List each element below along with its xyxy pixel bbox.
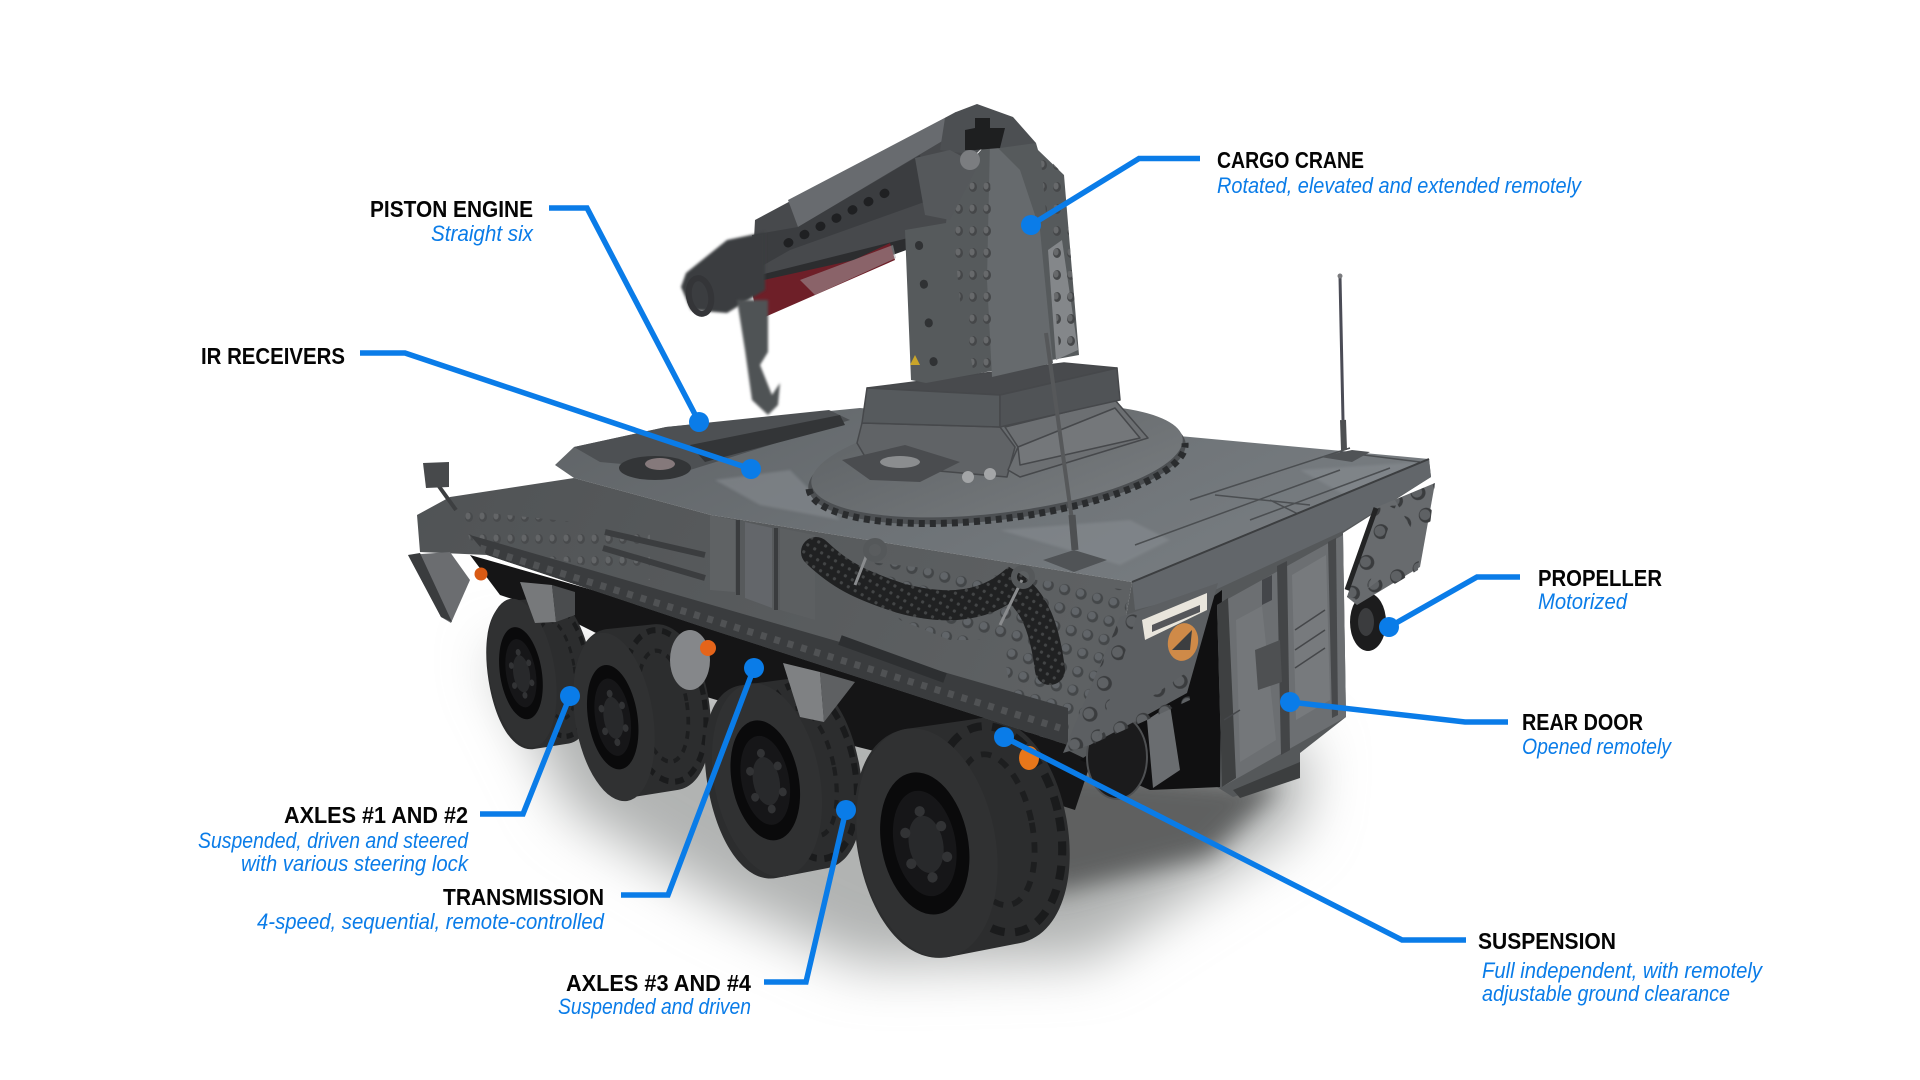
propeller xyxy=(1350,593,1386,651)
net chains xyxy=(855,541,1032,625)
deck seams xyxy=(1135,448,1420,545)
description: Opened remotely xyxy=(1522,734,1673,759)
callout: propeller xyxy=(1379,565,1662,637)
rear door underside xyxy=(1233,762,1300,798)
crane tower face xyxy=(987,140,1053,377)
description: Suspended and driven xyxy=(558,994,751,1019)
dark fill below boom xyxy=(750,213,936,305)
cargo net xyxy=(816,552,1050,670)
heading: PISTON ENGINE xyxy=(370,196,533,222)
turret disc xyxy=(802,387,1192,543)
wheel 1 xyxy=(476,588,603,754)
fenders xyxy=(520,582,855,722)
heading: AXLES #1 AND #2 xyxy=(284,802,468,828)
rear amber lamp xyxy=(1019,746,1039,770)
rear mechanism wheel xyxy=(1087,715,1147,799)
boom pivot xyxy=(915,150,980,220)
hull top deck xyxy=(555,408,1429,582)
callout: axles 1 and 2 xyxy=(198,686,580,876)
wheel 3 xyxy=(690,666,877,888)
right rear armour flap xyxy=(1347,483,1435,605)
side armour boxes xyxy=(710,515,815,620)
turret pedestal xyxy=(857,363,1148,477)
callout: axles 1 and 2: with various steering lock xyxy=(241,851,469,876)
head cross slot xyxy=(965,118,1005,150)
undercarriage xyxy=(470,555,1100,810)
crane boom xyxy=(752,112,975,277)
side stud rows xyxy=(460,510,1130,745)
callout: axles 3 and 4 xyxy=(558,800,856,1019)
red hydraulic arm xyxy=(750,243,895,320)
rear inner panel xyxy=(1147,705,1180,788)
callout: suspension xyxy=(994,727,1764,1006)
tower holes xyxy=(919,245,934,365)
hook loop xyxy=(686,276,714,316)
heading: CARGO CRANE xyxy=(1217,147,1364,173)
licence plate xyxy=(1142,593,1207,640)
boom holes xyxy=(788,188,895,243)
description: Full independent, with remotely xyxy=(1482,958,1764,983)
left rear armour flap xyxy=(1063,583,1218,753)
silver dome and amber lamp xyxy=(670,630,716,690)
deck reflections xyxy=(715,462,1420,565)
description: Rotated, elevated and extended remotely xyxy=(1217,173,1583,198)
ground shadow xyxy=(490,650,1310,965)
crane head xyxy=(940,104,1036,155)
callout: piston engine xyxy=(370,196,709,432)
description: Straight six xyxy=(431,221,534,246)
right antenna xyxy=(1320,274,1370,462)
rear hull xyxy=(1067,459,1431,797)
rear antenna xyxy=(1043,333,1107,572)
heading: PROPELLER xyxy=(1538,565,1662,591)
heading: AXLES #3 AND #4 xyxy=(566,970,751,996)
wheel 2 xyxy=(562,615,722,807)
crane hook head xyxy=(681,232,765,313)
callout: suspension: adjustable ground clearance xyxy=(1482,981,1730,1006)
turret hatch xyxy=(842,445,996,483)
boom top face xyxy=(788,112,956,227)
description: Suspended, driven and steered xyxy=(198,828,469,853)
rear door xyxy=(1217,535,1346,787)
hull side armour xyxy=(417,478,1132,745)
side rails xyxy=(603,532,945,678)
engine deck strip xyxy=(574,410,850,480)
heading: TRANSMISSION xyxy=(443,884,604,910)
description: Motorized xyxy=(1538,589,1628,614)
front amber lamp xyxy=(474,568,488,580)
tower studs xyxy=(948,150,1079,380)
rear dark cavity xyxy=(1080,590,1222,790)
crane tower xyxy=(905,138,1079,383)
heading: SUSPENSION xyxy=(1478,928,1616,954)
hook xyxy=(737,300,780,415)
vehicle xyxy=(408,104,1435,970)
description: 4-speed, sequential, remote-controlled xyxy=(257,909,605,934)
callout: rear door xyxy=(1280,692,1673,759)
heading: IR RECEIVERS xyxy=(201,343,345,369)
callout: cargo crane xyxy=(1021,147,1583,235)
mirror xyxy=(423,462,456,510)
callout: IR receivers xyxy=(201,343,761,479)
heading: REAR DOOR xyxy=(1522,709,1643,735)
front flap xyxy=(408,552,470,623)
side lower rail xyxy=(470,535,1068,745)
orange emblem xyxy=(1164,620,1202,664)
wheel 4 xyxy=(837,702,1088,970)
warning sign xyxy=(910,355,920,365)
callout: transmission xyxy=(257,658,764,934)
rear upper strip xyxy=(1132,459,1431,610)
